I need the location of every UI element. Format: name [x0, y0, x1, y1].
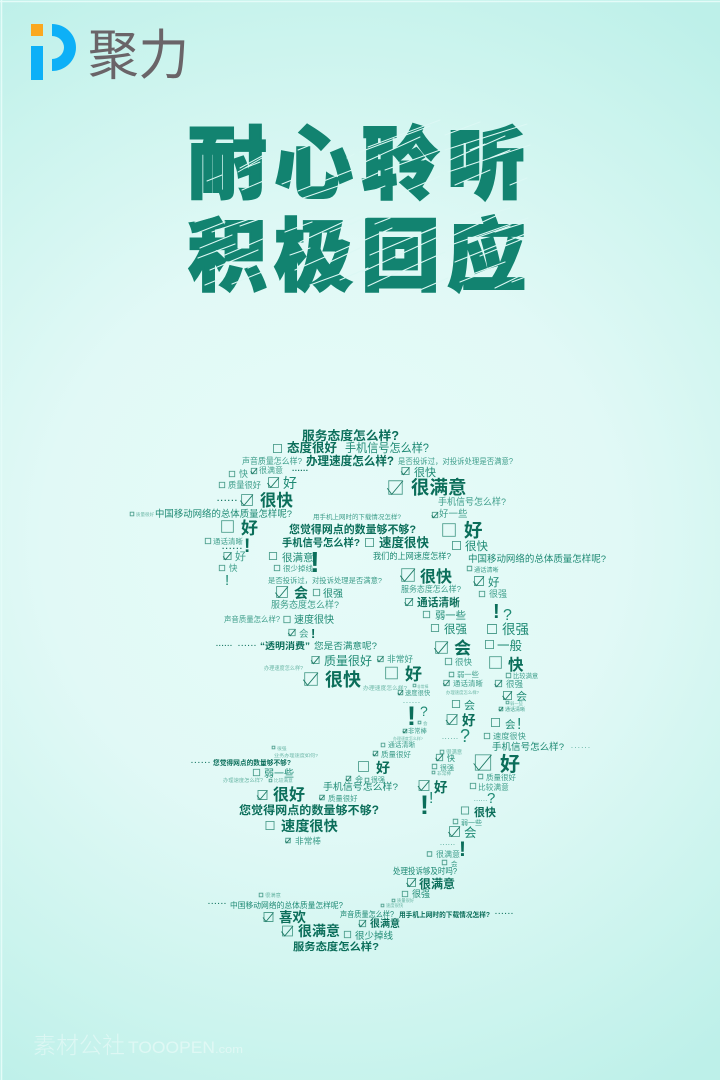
- answer: [467, 566, 499, 574]
- answer: [488, 622, 530, 637]
- answer: [288, 626, 315, 641]
- answer: 很满意: [436, 849, 460, 859]
- exclamation and question mark: !: [407, 701, 416, 731]
- answer: 质量很好: [136, 511, 154, 518]
- dots: ......: [217, 494, 237, 503]
- exclamation and question mark: [407, 701, 428, 731]
- question: 服务态度怎么样?: [401, 584, 461, 594]
- answer: [285, 835, 321, 846]
- answer: 好: [488, 575, 500, 589]
- answer: [401, 465, 436, 479]
- answer: 速度很快: [281, 818, 338, 835]
- answer: [253, 767, 294, 780]
- answer: 通话清晰: [213, 536, 243, 546]
- answer: 很强: [323, 587, 343, 600]
- answer: 很满意: [446, 748, 463, 756]
- dots: ......: [216, 641, 232, 648]
- answer: 很满意: [282, 551, 314, 564]
- answer: [402, 888, 430, 899]
- answer: 好: [235, 549, 246, 563]
- answer: [222, 519, 258, 538]
- dots: ......: [495, 909, 513, 916]
- answer: 会: [451, 859, 458, 868]
- answer: 很好: [273, 786, 305, 804]
- answer: 喜欢: [279, 909, 306, 925]
- question: 中国移动网络的总体质量怎样呢?: [155, 508, 292, 520]
- answer: 非常好: [387, 653, 413, 664]
- answer: 比较满意: [513, 671, 538, 680]
- answer: [442, 859, 458, 868]
- dots and exclamation: [440, 838, 466, 861]
- exclamations: !: [429, 790, 433, 807]
- answer: 好: [434, 780, 448, 795]
- answer: 快: [229, 563, 238, 573]
- answer: [453, 818, 482, 827]
- question: 服务态度怎么样?: [293, 940, 379, 953]
- answer: 通话清晰: [417, 596, 460, 609]
- answer: [303, 670, 361, 690]
- answer: [346, 774, 363, 784]
- answer: 速度很快: [379, 535, 430, 550]
- answer: !: [311, 626, 315, 641]
- question: 办理速度怎么样?: [363, 684, 407, 692]
- answer: 会: [516, 690, 527, 703]
- question: [260, 640, 377, 651]
- dots: ......: [238, 641, 256, 648]
- answer: 很满意: [370, 917, 400, 930]
- answer: [400, 568, 452, 586]
- answer: [365, 775, 385, 784]
- exclamation and question mark: !: [493, 601, 500, 623]
- question: 您是否满意呢?: [314, 640, 377, 651]
- answer: [495, 679, 524, 689]
- answer: 快: [447, 753, 455, 763]
- answer: [491, 716, 521, 733]
- title: 积极回应: [188, 212, 526, 301]
- answer: [436, 753, 455, 763]
- answer: [499, 706, 525, 713]
- dots: ......: [292, 464, 308, 473]
- watermark: .com: [215, 1044, 243, 1056]
- answer: 一般: [497, 638, 523, 653]
- answer: [418, 780, 448, 795]
- answer: 好: [464, 520, 483, 541]
- dots and exclamation: !: [459, 838, 466, 861]
- question: “透明消费”: [260, 640, 310, 651]
- dots: ......: [191, 758, 210, 765]
- answer: [452, 539, 488, 553]
- answer: 会: [294, 585, 308, 601]
- answer: [263, 909, 306, 925]
- answer: [381, 902, 404, 909]
- dots and exclamation: ......: [440, 840, 455, 847]
- answer: [272, 745, 287, 752]
- question: 声音质量怎么样?: [242, 456, 302, 466]
- exclamation and question mark: [493, 601, 512, 624]
- answer: [440, 748, 463, 756]
- logo wordmark: 聚力: [88, 26, 189, 86]
- answer: [381, 740, 415, 749]
- answer: 很快: [260, 491, 294, 510]
- question: 中国移动网络的总体质量怎样呢?: [230, 900, 344, 910]
- exclamation and question mark: ?: [420, 703, 428, 719]
- answer: [313, 587, 343, 600]
- question: 是否投诉过，对投诉处理是否满意?: [268, 575, 382, 585]
- answer: 会: [464, 826, 477, 840]
- answer: 速度很快: [386, 902, 404, 909]
- answer: [267, 475, 297, 491]
- answer: 非常棒: [408, 726, 428, 735]
- exclamations: !: [420, 790, 429, 820]
- question: 手机信号怎么样?: [438, 496, 506, 508]
- answer: [377, 653, 413, 664]
- answer: [223, 549, 246, 563]
- answer: 很满意: [419, 876, 455, 891]
- question: 声音质量怎么样?: [224, 614, 281, 624]
- answer: 质量很好: [397, 897, 415, 904]
- answer: [269, 551, 314, 564]
- dots and question mark: ?: [460, 726, 470, 746]
- question: 手机信号怎么样?: [323, 781, 398, 793]
- answer: 非常棒: [437, 770, 451, 777]
- answer: [257, 786, 305, 804]
- question: 办理速度怎么样?: [306, 453, 394, 468]
- answer: 态度很好: [287, 440, 337, 455]
- answer: [418, 720, 428, 727]
- answer: 非常棒: [295, 835, 321, 846]
- answer: 比较满意: [274, 777, 293, 784]
- dots and question mark: [474, 790, 495, 807]
- answer: [219, 563, 238, 573]
- question: 中国移动网络的总体质量怎样呢?: [468, 553, 606, 565]
- answer: !: [517, 716, 521, 733]
- answer: [485, 638, 523, 653]
- answer: 很快: [420, 568, 452, 586]
- answer: 弱一些: [435, 609, 466, 622]
- answer: 很少掉线: [355, 930, 394, 942]
- answer: 很强: [440, 763, 454, 772]
- answer: 快: [508, 656, 524, 674]
- question: 手机信号怎么样?: [282, 536, 360, 549]
- answer: 很强: [444, 622, 467, 636]
- answer: [506, 700, 524, 707]
- question: 服务态度怎么样?: [271, 599, 339, 611]
- answer: 会: [454, 638, 471, 658]
- dots and question mark: ......: [442, 734, 458, 741]
- answer: [432, 770, 451, 777]
- answer: 速度很快: [405, 688, 431, 697]
- answer: [398, 688, 431, 697]
- answer: [431, 622, 467, 636]
- answer: [392, 897, 415, 904]
- answer: 很强: [489, 588, 507, 599]
- answer: 很快: [465, 539, 488, 553]
- question: 处理投诉够及时吗?: [393, 866, 457, 876]
- answer: 弱一些: [264, 767, 294, 780]
- answer: 很强: [277, 745, 287, 752]
- answer: [275, 585, 308, 601]
- answer: [229, 468, 248, 479]
- answer: [269, 777, 293, 784]
- answer: [259, 891, 281, 899]
- answer: [448, 826, 477, 840]
- answer: 很快: [325, 670, 361, 690]
- answer: 通话清晰: [453, 678, 483, 688]
- answer: 质量很好: [228, 480, 261, 490]
- answer: 会: [423, 720, 428, 727]
- answer: [490, 656, 524, 674]
- answer: [423, 609, 466, 622]
- answer: 好: [462, 713, 476, 728]
- answer: 比较满意: [478, 782, 509, 792]
- exclamation: !: [225, 572, 229, 589]
- question: 办理速度怎么样?: [223, 777, 263, 784]
- answer: [479, 588, 507, 599]
- answer: 好: [283, 475, 297, 491]
- question: 您觉得网点的数量够不够?: [213, 758, 291, 767]
- answer: 好一些: [439, 508, 468, 520]
- watermark: 素材公社: [33, 1032, 125, 1058]
- title: 耐心聆听: [188, 120, 526, 209]
- answer: 快: [239, 468, 248, 479]
- question: 业务办理速度如何?: [274, 752, 319, 759]
- answer: 速度很快: [294, 613, 334, 626]
- answer: [503, 690, 527, 703]
- answer: 很快: [474, 805, 496, 819]
- answer: [446, 713, 476, 728]
- answer: 很少掉线: [283, 563, 313, 573]
- answer: 很强: [412, 888, 430, 899]
- exclamation and question mark: ?: [503, 607, 512, 624]
- answer: 很快: [414, 465, 436, 479]
- answer: 很满意: [259, 465, 283, 475]
- answer: [443, 678, 483, 688]
- dots and question mark: ......: [474, 797, 487, 803]
- question: 用手机上网时的下载情况怎样?: [313, 512, 401, 521]
- question: 您觉得网点的数量够不够?: [289, 522, 416, 536]
- answer: [373, 749, 411, 759]
- answer: 很强: [502, 622, 530, 637]
- watermark: [33, 1032, 243, 1058]
- answer: 通话清晰: [388, 740, 415, 749]
- answer: [474, 753, 520, 776]
- question: 您觉得网点的数量够不够?: [239, 803, 379, 817]
- question: 用手机上网时的下载情况怎样?: [399, 910, 490, 919]
- question: 手机信号怎么样?: [345, 440, 429, 455]
- answer: 会: [505, 718, 516, 731]
- answer: 质量很好: [486, 772, 516, 782]
- dots: ......: [403, 698, 420, 705]
- answer: [413, 684, 429, 689]
- answer: 很满意: [298, 923, 340, 939]
- answer: [445, 657, 473, 667]
- dots: ......: [222, 542, 242, 551]
- logo: [31, 24, 189, 86]
- answer: 质量很好: [381, 749, 411, 759]
- question with dots: [492, 741, 590, 753]
- answer: 好: [376, 760, 390, 776]
- dots and question mark: ?: [487, 790, 495, 807]
- question: 服务态度怎么样?: [302, 428, 399, 443]
- icon: logo mark: [31, 24, 76, 80]
- answer: 会: [299, 628, 309, 640]
- answer: 好: [500, 753, 520, 776]
- answer: 很满意: [265, 891, 281, 899]
- answer: [359, 760, 390, 776]
- answer: 质量很好: [324, 654, 372, 668]
- answer: 弱一些: [457, 670, 479, 679]
- answer: 很强: [506, 679, 524, 689]
- question: 办理速度怎么样?: [393, 735, 424, 741]
- word cloud: survey questions and checkbox answers: [130, 428, 606, 953]
- answer: 会: [355, 774, 363, 784]
- answer: [130, 511, 154, 518]
- answer: [240, 491, 294, 510]
- exclamation: !: [310, 547, 320, 579]
- answer: [427, 849, 460, 859]
- answer: 通话清晰: [474, 566, 499, 574]
- answer: [506, 671, 538, 680]
- answer: [359, 917, 400, 930]
- answer: 弱一些: [461, 818, 482, 827]
- answer: [407, 876, 455, 891]
- answer: [386, 665, 422, 684]
- answer: [432, 763, 454, 772]
- watermark: TOOOPEN: [128, 1038, 215, 1057]
- answer: [284, 613, 334, 626]
- answer: [452, 699, 475, 712]
- question: 办理速度怎么样?: [446, 689, 479, 696]
- answer: [274, 563, 313, 573]
- answer: 好: [241, 519, 258, 538]
- answer: 弱一些: [510, 700, 524, 707]
- title: [188, 120, 530, 301]
- answer: 很快: [455, 657, 473, 667]
- answer: 速度很快: [493, 731, 526, 741]
- dots: ......: [208, 899, 226, 906]
- answer: [403, 726, 428, 735]
- dots and question mark: [442, 726, 470, 746]
- question: 办理速度怎么样?: [264, 664, 303, 672]
- answer: [443, 520, 483, 541]
- answer: [251, 465, 283, 475]
- question with dots: 手机信号怎么样?: [492, 741, 564, 753]
- answer: 好: [405, 665, 422, 684]
- answer: [434, 638, 471, 658]
- answer: [461, 805, 496, 819]
- answer: 很满意: [411, 477, 467, 498]
- exclamations: [420, 790, 433, 820]
- answer: 非常棒: [417, 684, 429, 689]
- question: 声音质量怎么样?: [340, 909, 394, 919]
- answer: 通话清晰: [505, 706, 525, 713]
- question: 是否投诉过，对投诉处理是否满意?: [398, 456, 514, 466]
- answer: 会: [464, 699, 475, 712]
- answer: 很强: [371, 775, 385, 784]
- answer: 质量很好: [328, 794, 358, 803]
- answer: [474, 575, 500, 589]
- question with dots: ......: [571, 743, 590, 750]
- exclamation: !: [244, 536, 250, 557]
- question: 我们的上网速度怎样?: [373, 551, 451, 561]
